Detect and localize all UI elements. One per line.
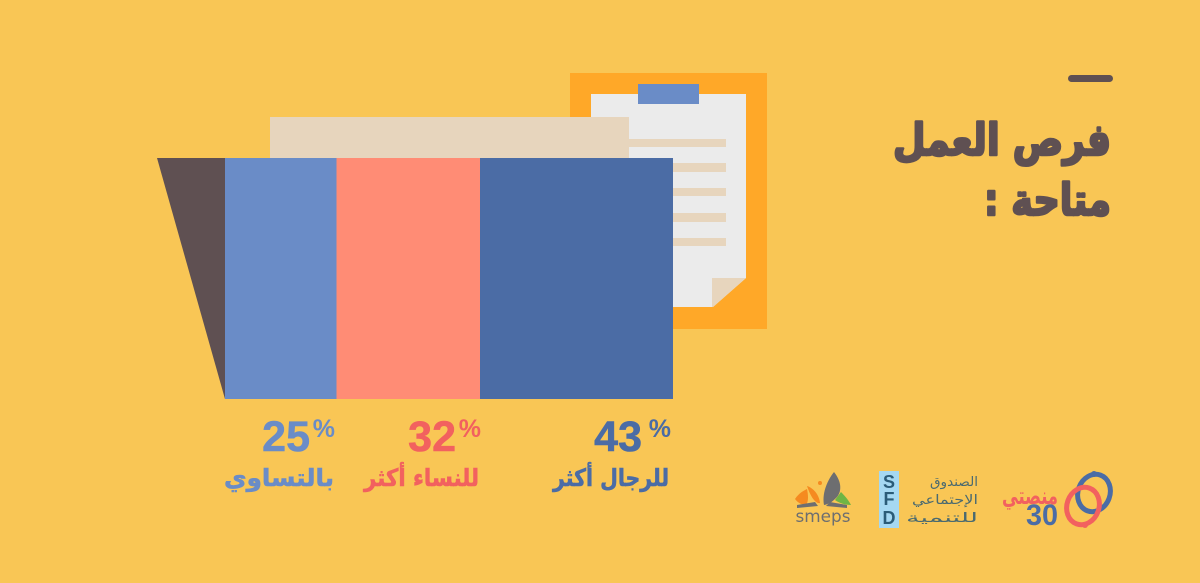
bar: women 32% bbox=[336, 158, 480, 399]
logo: SFD: F bbox=[884, 489, 894, 509]
stat: men 43%: 43 bbox=[594, 413, 642, 461]
icon: clipboard with paper bbox=[570, 73, 767, 329]
stat: equal 25%: بالتساوي bbox=[224, 464, 334, 492]
logo: smeps: smeps bbox=[796, 507, 851, 527]
title accent line bbox=[1068, 75, 1113, 82]
logo: SFD bbox=[879, 471, 978, 528]
title bbox=[893, 115, 1111, 226]
title: فرص العمل bbox=[893, 115, 1111, 166]
stat: equal 25%: % bbox=[313, 415, 335, 443]
logo: SFD: S bbox=[883, 472, 895, 492]
stat: men 43%: للرجال أكثر bbox=[552, 462, 669, 492]
stat: men 43%: % bbox=[649, 415, 671, 443]
folder flap bbox=[157, 158, 225, 399]
bar: men 43% bbox=[480, 158, 673, 399]
logo: SFD: الصندوق bbox=[930, 475, 978, 490]
stat: equal 25% bbox=[224, 413, 335, 492]
folder bar chart bbox=[157, 158, 673, 399]
logo: SFD: D bbox=[882, 508, 896, 528]
stat: men 43% bbox=[552, 413, 671, 492]
bar: equal 25% bbox=[225, 158, 336, 399]
logo: SFD: الإجتماعي bbox=[912, 493, 978, 508]
logo: SFD: للتنمية bbox=[906, 511, 978, 526]
logo: Minassati 30: 30 bbox=[1026, 499, 1058, 532]
folder back sheet bbox=[270, 117, 629, 158]
logo: smeps bbox=[795, 472, 851, 527]
stat: equal 25%: 25 bbox=[262, 413, 310, 461]
stat: women 32%: للنساء أكثر bbox=[363, 462, 479, 492]
logo: Minassati 30: منصتي bbox=[1002, 482, 1058, 510]
title: متاحة : bbox=[984, 175, 1111, 226]
logo: Minassati 30 bbox=[1002, 470, 1116, 532]
stat: women 32%: % bbox=[459, 415, 481, 443]
stat: women 32% bbox=[363, 413, 481, 492]
stat: women 32%: 32 bbox=[408, 413, 456, 461]
